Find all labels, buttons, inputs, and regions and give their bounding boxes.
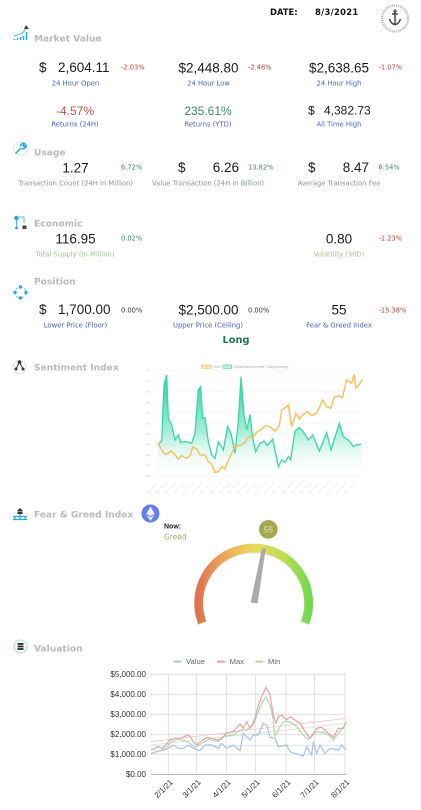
x axis labels: 2021-02-12 <box>199 481 213 495</box>
line: min <box>151 697 345 753</box>
metric: average fee: $ <box>308 160 316 174</box>
y axis labels: 30K <box>146 463 151 467</box>
x axis labels: 7/1/21 <box>299 777 321 800</box>
change: total supply: 0.02% <box>121 235 142 243</box>
date value: 8/3/2021 <box>315 7 358 17</box>
legend: Max <box>230 657 244 666</box>
x axis labels <box>145 481 357 495</box>
y axis labels: 60K <box>146 400 151 404</box>
metric: average fee: 8.47 <box>343 160 369 174</box>
label: value transaction: Value Transaction (24H in Billion) <box>152 180 264 188</box>
change: transaction count: 6.72% <box>121 164 142 172</box>
line: sentiment <box>158 375 361 467</box>
legend: Global Measurement 7 Days average <box>233 365 289 369</box>
metric: average fee <box>308 160 369 174</box>
x axis labels: 2021-05-21 <box>325 481 339 495</box>
label: transaction count: Transaction Count (24H in Million) <box>18 180 133 188</box>
icon: economic flow <box>14 216 26 230</box>
x axis labels: 2021-02-19 <box>208 481 222 495</box>
metric: all time high: 4,382.73 <box>324 103 371 117</box>
y axis labels: $3,000.00 <box>110 710 147 719</box>
metric: returns ytd: 235.61% <box>184 104 232 118</box>
heading: Position: Position <box>34 277 76 287</box>
y axis labels: 75K <box>146 369 151 373</box>
y axis labels: 40K <box>146 442 151 446</box>
x axis labels: 2021-04-09 <box>271 481 285 495</box>
x axis labels: 2021-04-23 <box>289 481 303 495</box>
legend <box>201 365 289 369</box>
change: fear and greed: -15.38% <box>378 306 406 314</box>
x axis labels: 2021-06-04 <box>343 481 357 495</box>
x axis labels: 2021-04-16 <box>280 481 294 495</box>
x axis labels: 2021-05-14 <box>316 481 330 495</box>
label: lower price: Lower Price (Floor) <box>44 322 107 330</box>
y axis labels: 35K <box>146 453 151 457</box>
x axis labels: 5/1/21 <box>240 777 262 800</box>
signal: Long: Long <box>223 335 249 346</box>
heading: Economic: Economic <box>34 219 83 229</box>
change: lower price: 0.00% <box>121 306 142 314</box>
line: price <box>158 374 362 472</box>
metric: transaction count: 1.27 <box>62 160 89 175</box>
x axis labels: 2021-01-29 <box>181 481 195 495</box>
x axis labels <box>153 777 352 800</box>
line chart: sentiment index <box>145 364 363 495</box>
y axis labels: 55K <box>146 411 151 415</box>
x axis labels: 8/1/21 <box>329 777 352 800</box>
x axis labels: 2021-03-12 <box>235 481 249 495</box>
label: volatility: Volatility (30D) <box>314 251 364 259</box>
heading: Sentiment Index: Sentiment Index <box>34 363 119 373</box>
x axis labels: 2021-04-02 <box>262 481 276 495</box>
change: volatility: -1.23% <box>378 235 402 243</box>
x axis labels: 2021-03-26 <box>253 481 267 495</box>
legend: Price <box>213 365 221 369</box>
line chart: valuation <box>110 657 352 800</box>
change: open: -2.03% <box>121 64 145 72</box>
icon: usage wrench <box>13 141 28 156</box>
y axis labels: 45K <box>146 432 151 436</box>
text: greed label: Greed <box>164 532 187 541</box>
x axis labels: 2021-05-07 <box>307 481 321 495</box>
x axis labels: 2021-02-26 <box>217 481 231 495</box>
label: fear and greed: Fear & Greed Index <box>306 322 372 330</box>
heading: Fear & Greed Index: Fear & Greed Index <box>34 510 133 520</box>
x axis labels: 2021-03-05 <box>226 481 240 495</box>
label: total supply: Total Supply (In Million) <box>35 251 115 259</box>
y axis labels <box>110 670 147 779</box>
x axis labels: 2021-01-22 <box>172 481 186 495</box>
gauge badge <box>259 520 278 539</box>
x axis labels: 2021-02-05 <box>190 481 204 495</box>
metric: value transaction: 6.26 <box>213 160 239 174</box>
line: max <box>151 687 346 750</box>
icon: market value growth bars <box>14 25 29 40</box>
icon: sentiment network <box>12 360 26 374</box>
change: upper price: 0.00% <box>248 306 269 314</box>
label: returns 24h: Returns (24H) <box>51 121 99 129</box>
metric: total supply: 116.95 <box>55 231 96 246</box>
area: sentiment <box>158 375 361 477</box>
metric: all time high: $ <box>308 103 315 117</box>
metric: 24 hour high: $2,638.65 <box>309 60 369 75</box>
legend: Value <box>186 657 205 666</box>
x axis labels: 2021-03-19 <box>244 481 258 495</box>
icon: position nodes <box>13 285 28 300</box>
metric: fear and greed: 55 <box>331 302 347 317</box>
line: value <box>151 723 346 756</box>
text: now label: Now: <box>164 524 181 530</box>
y axis labels: 50K <box>146 421 151 425</box>
label: 24 hour low: 24 Hour Low <box>187 80 230 88</box>
y axis labels: $0.00 <box>126 770 147 779</box>
metric: 24 hour low: $2,448.80 <box>178 60 239 75</box>
change: average fee: 6.54% <box>378 164 400 172</box>
y axis labels: $4,000.00 <box>110 690 147 699</box>
trend lines <box>151 718 346 746</box>
label: returns ytd: Returns (YTD) <box>184 121 232 129</box>
icon: fear and greed hierarchy <box>13 508 27 520</box>
metric: value transaction <box>178 160 239 174</box>
gauge arc <box>199 548 309 623</box>
label: average fee: Average Transaction Fee <box>297 180 381 188</box>
x axis labels: 3/1/21 <box>181 777 203 800</box>
gauge badge: 55 <box>264 524 273 534</box>
metric: value transaction: $ <box>178 160 186 174</box>
change: value transaction: 13.82% <box>248 164 274 172</box>
x axis labels: 2021-01-15 <box>163 481 177 495</box>
logo: anchor badge <box>380 4 410 33</box>
heading: Usage: Usage <box>34 148 66 158</box>
label: upper price: Upper Price (Ceiling) <box>173 322 243 330</box>
change: low: -2.48% <box>248 64 272 72</box>
x axis labels: 2021-01-08 <box>154 481 168 495</box>
metric: upper price: $2,500.00 <box>178 302 239 317</box>
y axis labels: $1,000.00 <box>110 750 147 759</box>
metric: returns 24h: -4.57% <box>56 104 94 118</box>
y axis labels <box>146 369 151 478</box>
x axis labels: 4/1/21 <box>211 777 233 800</box>
x axis labels: 6/1/21 <box>270 777 293 800</box>
metric: 24 hour open: 2,604.11 <box>58 60 110 74</box>
x axis labels: 2021-05-28 <box>334 481 348 495</box>
label: 24 hour open: 24 Hour Open <box>52 80 99 88</box>
heading: Valuation: Valuation <box>34 644 83 654</box>
gauge needle <box>251 548 266 603</box>
date label: DATE: <box>270 7 298 17</box>
y axis labels: $5,000.00 <box>110 670 147 679</box>
label: all time high: All Time High <box>316 121 362 129</box>
metric: lower price: $ <box>39 302 47 317</box>
y axis labels: $2,000.00 <box>110 730 147 739</box>
x axis labels: 2021-04-30 <box>298 481 312 495</box>
change: high: -1.07% <box>378 64 402 72</box>
icon: ethereum <box>142 504 160 522</box>
metric: 24 hour open: $ <box>39 60 47 74</box>
metric: lower price: 1,700.00 <box>58 302 111 317</box>
legend <box>173 657 280 666</box>
x axis labels: 2/1/21 <box>153 777 175 800</box>
label: 24 hour high: 24 Hour High <box>317 80 361 88</box>
x axis labels: 2021-01-01 <box>145 481 159 495</box>
metric: volatility: 0.80 <box>326 231 352 246</box>
y axis labels: 65K <box>146 390 151 394</box>
gauge <box>194 520 313 625</box>
heading: Market Value: Market Value <box>34 34 102 44</box>
y axis labels: 70K <box>146 379 151 383</box>
y axis labels: 25K <box>146 474 151 478</box>
icon: valuation database <box>14 640 28 654</box>
legend: Min <box>268 657 280 666</box>
